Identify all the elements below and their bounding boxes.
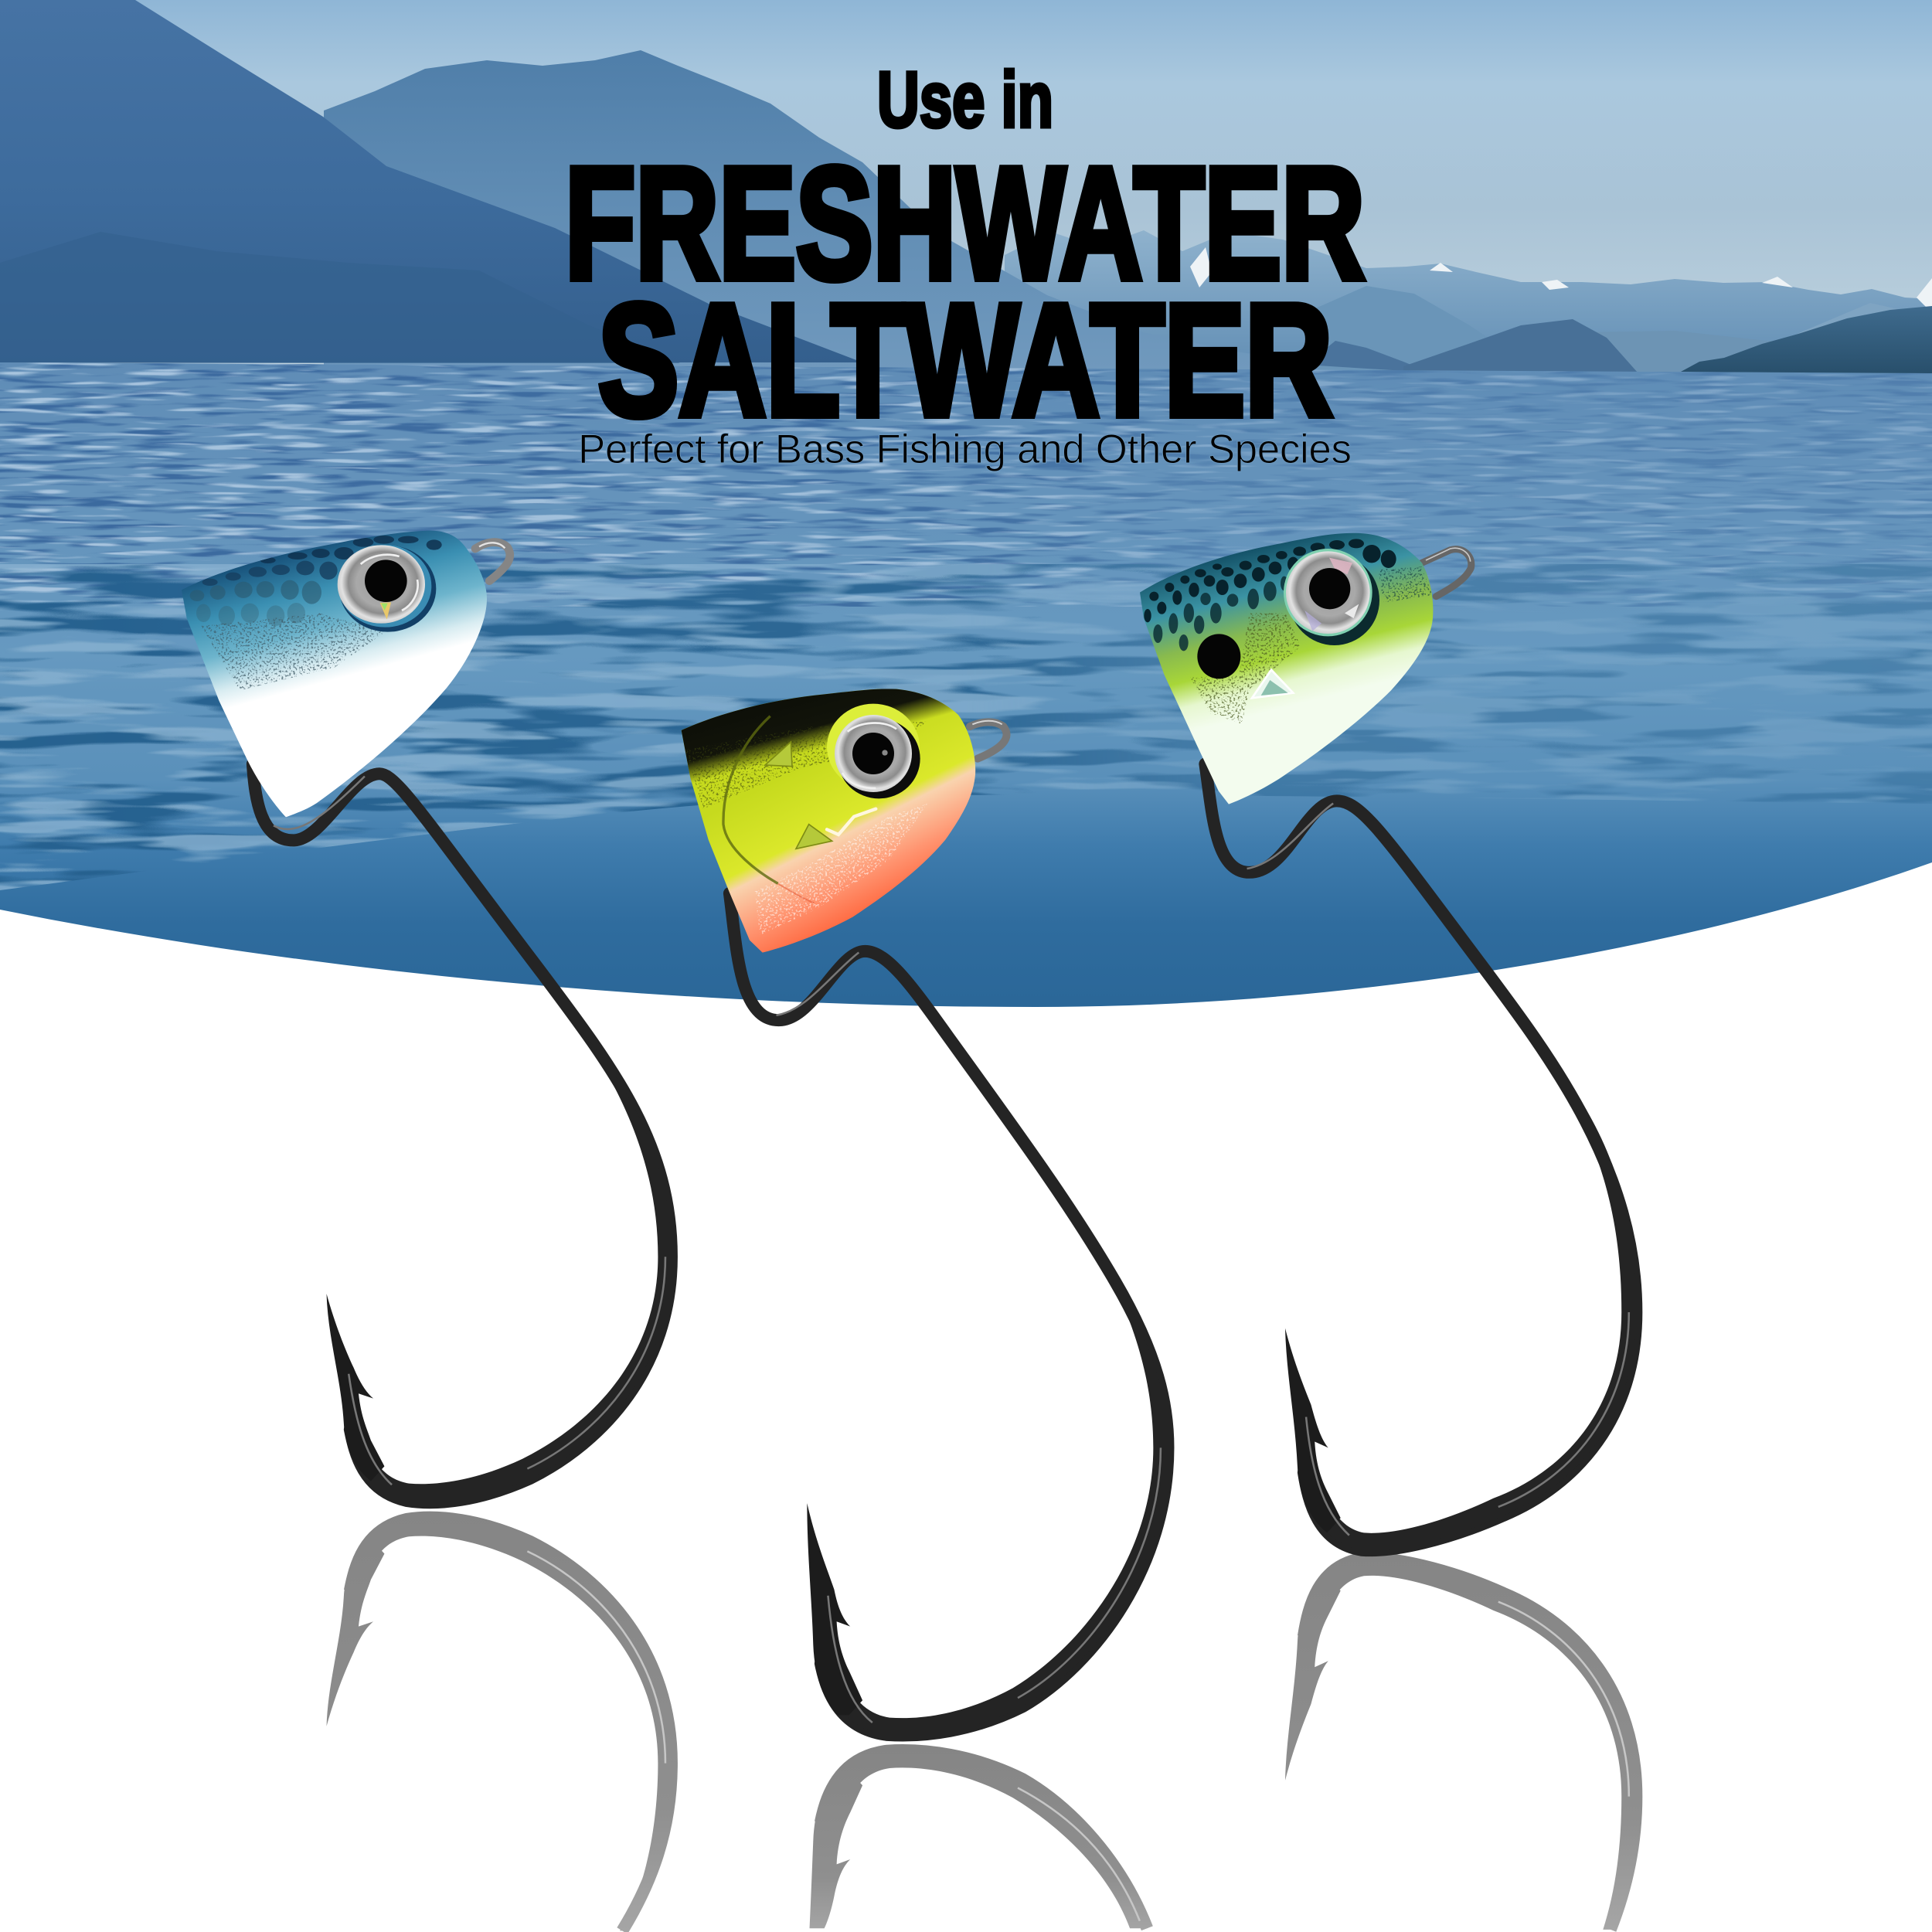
hook: left (253, 764, 672, 1502)
reflection: left hook (327, 1518, 672, 1930)
subheading: perfect for bass fishing: Perfect for Bass Fishing and Other Species (578, 427, 1352, 472)
lure head: chartreuse and orange (678, 685, 1007, 956)
hook: right (1205, 764, 1636, 1550)
background: lake water with ripples (0, 359, 1932, 1016)
background: sky (0, 0, 1932, 379)
hook: middle (730, 893, 1168, 1736)
heading: freshwater: FRESHWATER (565, 134, 1365, 312)
heading: use in: Use in (877, 56, 1053, 144)
lure head: green and teal with spot (1136, 531, 1471, 806)
heading: saltwater: SALTWATER (598, 271, 1332, 449)
reflection: middle hook (810, 1750, 1147, 1928)
background: mountains (0, 0, 1932, 379)
reflection: right hook (1285, 1559, 1636, 1930)
lure head: blue and white (178, 528, 510, 819)
